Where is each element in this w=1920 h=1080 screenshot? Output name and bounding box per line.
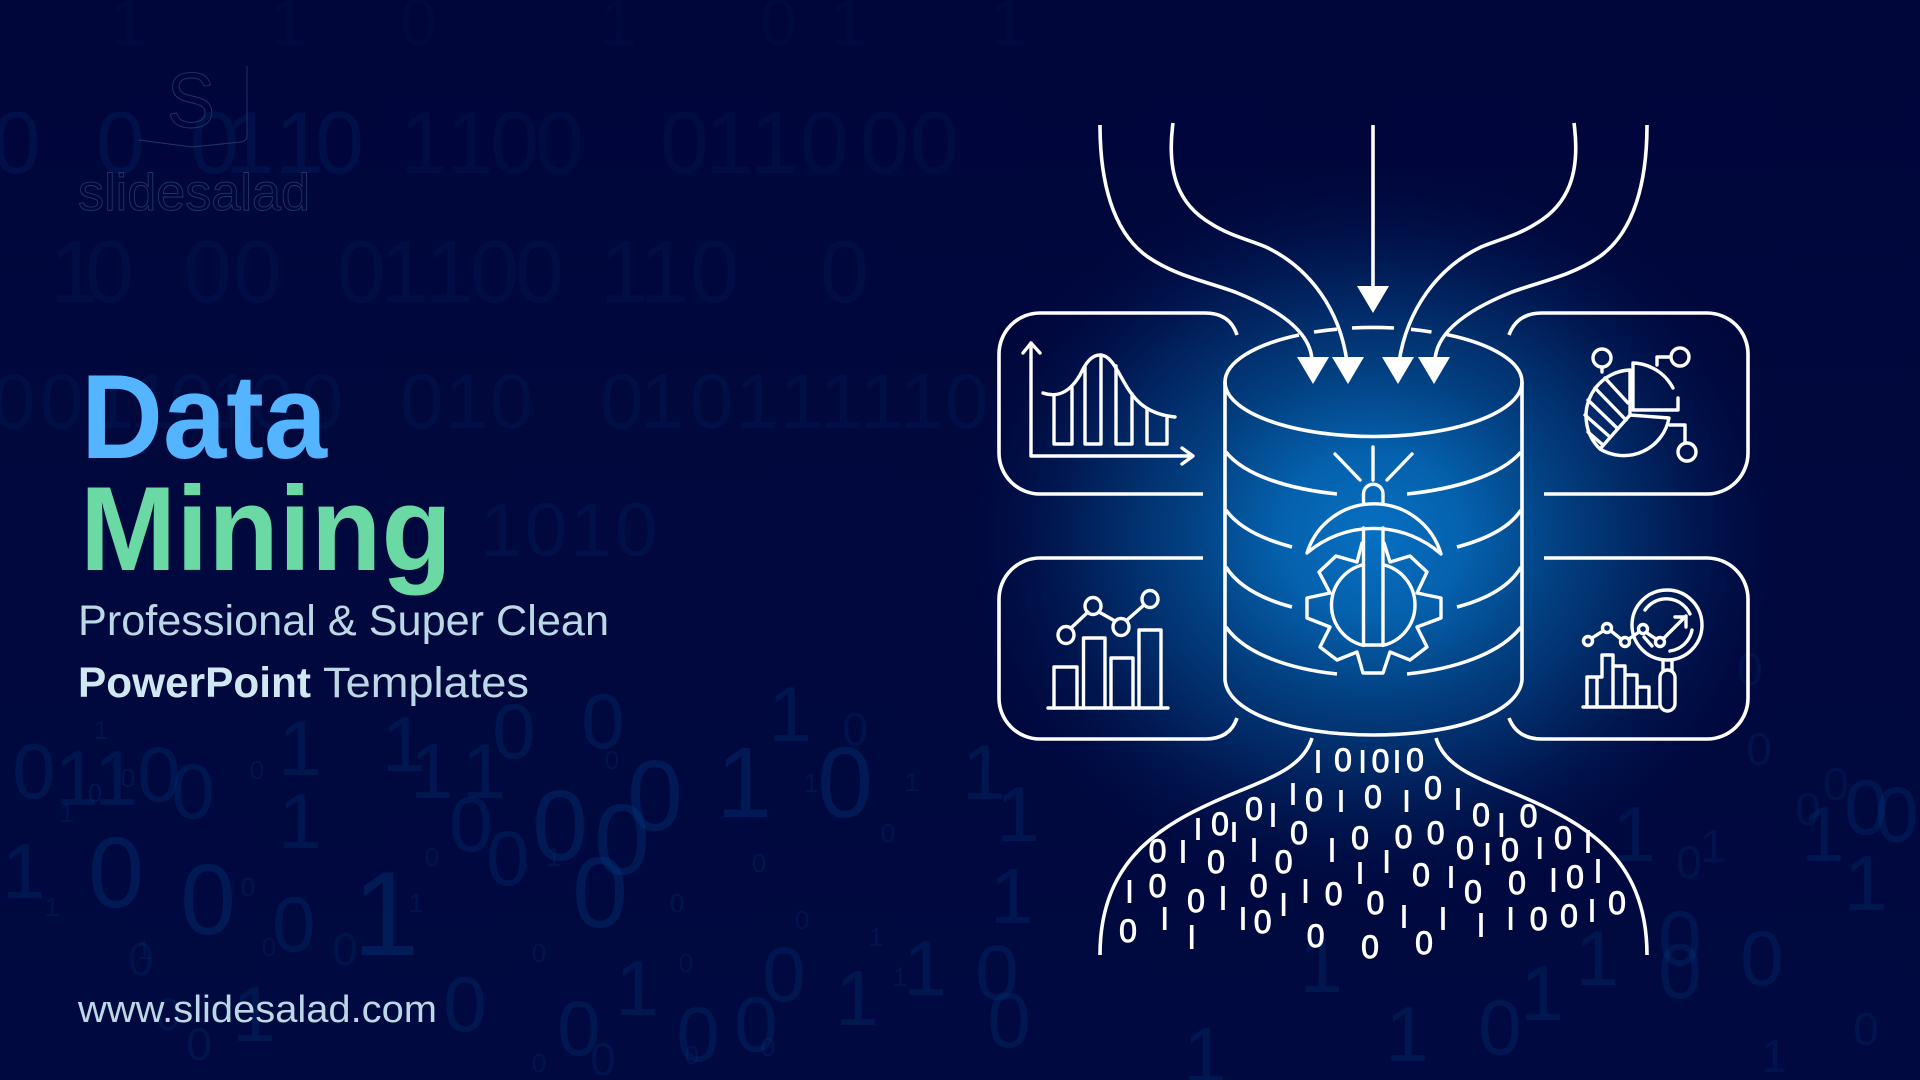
binary output: zeros: 0000000000000000000000000000000000000 [1119,742,1626,965]
background scattered binary: 1 [353,847,419,981]
background scattered binary: 01000000 [88,727,873,956]
logo: slidesalad: slidesalad [78,164,310,222]
background binary rows [0,0,1027,573]
icon: pie chart [1585,348,1696,461]
website url: www.slidesalad.com [77,989,437,1031]
background scattered binary: 10010011011001100010100000 [45,715,919,1078]
background binary rows: 1100011000 [400,93,959,192]
subtitle: PowerPoint [78,659,311,707]
background binary rows: 1010 [480,488,657,573]
database cylinder [1225,327,1522,735]
background binary rows: 00110100010010111110 [0,357,988,445]
icon: bar and line chart [1048,590,1168,708]
panel: bottom left [999,558,1237,739]
output funnel curves [1100,738,1647,955]
subtitle: Templates [323,659,529,707]
binary output: ones [1130,750,1598,949]
title: Data [81,350,328,484]
icon: magnifier analytics [1583,590,1702,711]
background scattered binary: 0000001000000010 [128,558,1879,1080]
panel: bottom right [1509,558,1748,739]
logo: slidesalad: S [167,56,215,144]
background binary rows: 000110 [0,93,364,192]
panel: top left [999,313,1237,494]
icon: pickaxe and gear [1307,447,1441,673]
panel: top right [1509,313,1748,494]
central glow [953,165,1793,905]
logo: slidesalad [78,56,310,222]
subtitle [78,597,609,707]
icon: bell curve chart [1023,343,1193,464]
subtitle: Professional & Super Clean [78,597,609,645]
background binary rows: 1000011001100 [50,222,869,321]
title [80,350,452,596]
input arrows [1100,123,1647,384]
title: Mining [80,462,452,596]
